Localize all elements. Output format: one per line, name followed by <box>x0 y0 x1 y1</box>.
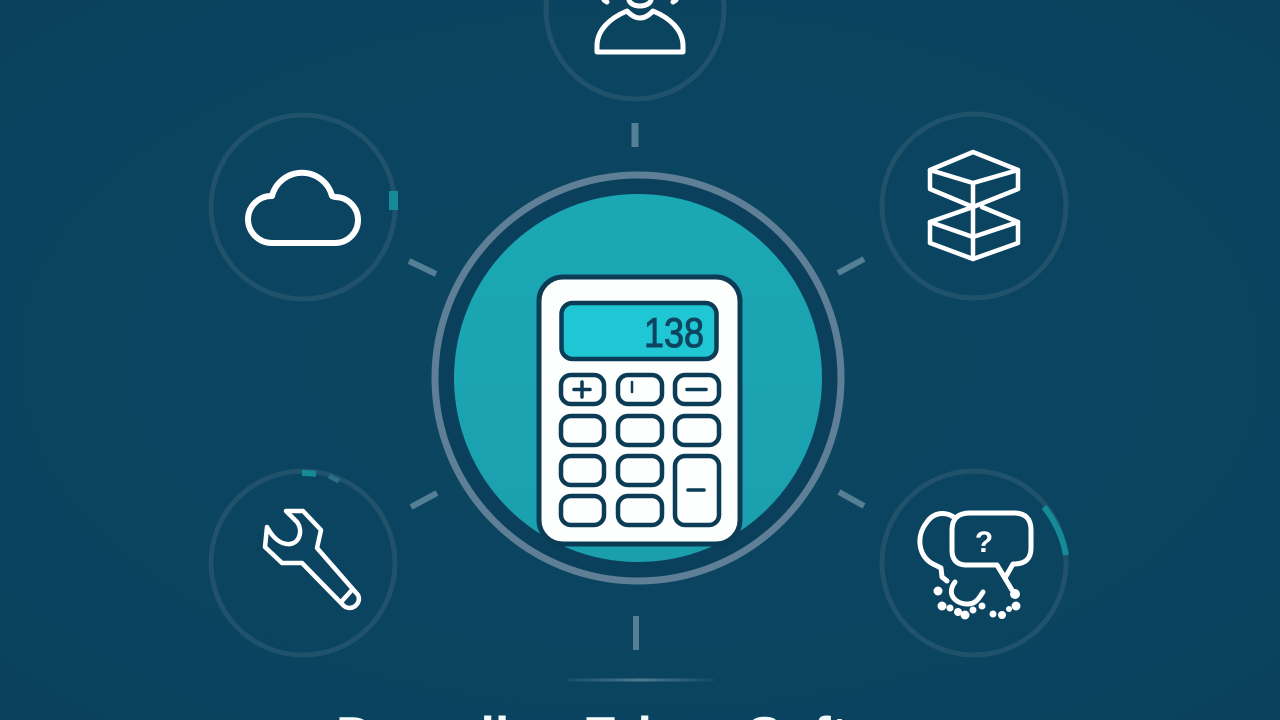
divider rule <box>568 678 714 682</box>
central hub <box>435 175 841 581</box>
node: cloud <box>211 115 398 299</box>
icon: stacked boxes <box>930 152 1018 259</box>
node: person (top) <box>546 0 724 99</box>
accent arc <box>1044 507 1066 555</box>
question mark: ? <box>975 526 993 559</box>
calculator keypad <box>561 375 719 525</box>
secondary accent mark <box>329 476 339 481</box>
connector ticks <box>409 123 864 650</box>
icon: cloud <box>248 173 358 243</box>
gear teeth <box>934 586 1020 620</box>
icon: calculator <box>539 277 740 544</box>
node: wrench <box>211 471 395 655</box>
accent mark <box>389 191 398 210</box>
calculator display: 138 <box>644 309 704 356</box>
icon: speech bubbles and gears <box>920 513 1031 620</box>
node: question and gears <box>882 471 1066 655</box>
calculator display <box>562 303 716 359</box>
node: boxes <box>882 114 1066 298</box>
title (cropped by bottom edge) <box>336 707 967 720</box>
accent mark <box>302 473 316 474</box>
icon: person <box>597 0 683 52</box>
icon: wrench <box>265 511 359 608</box>
